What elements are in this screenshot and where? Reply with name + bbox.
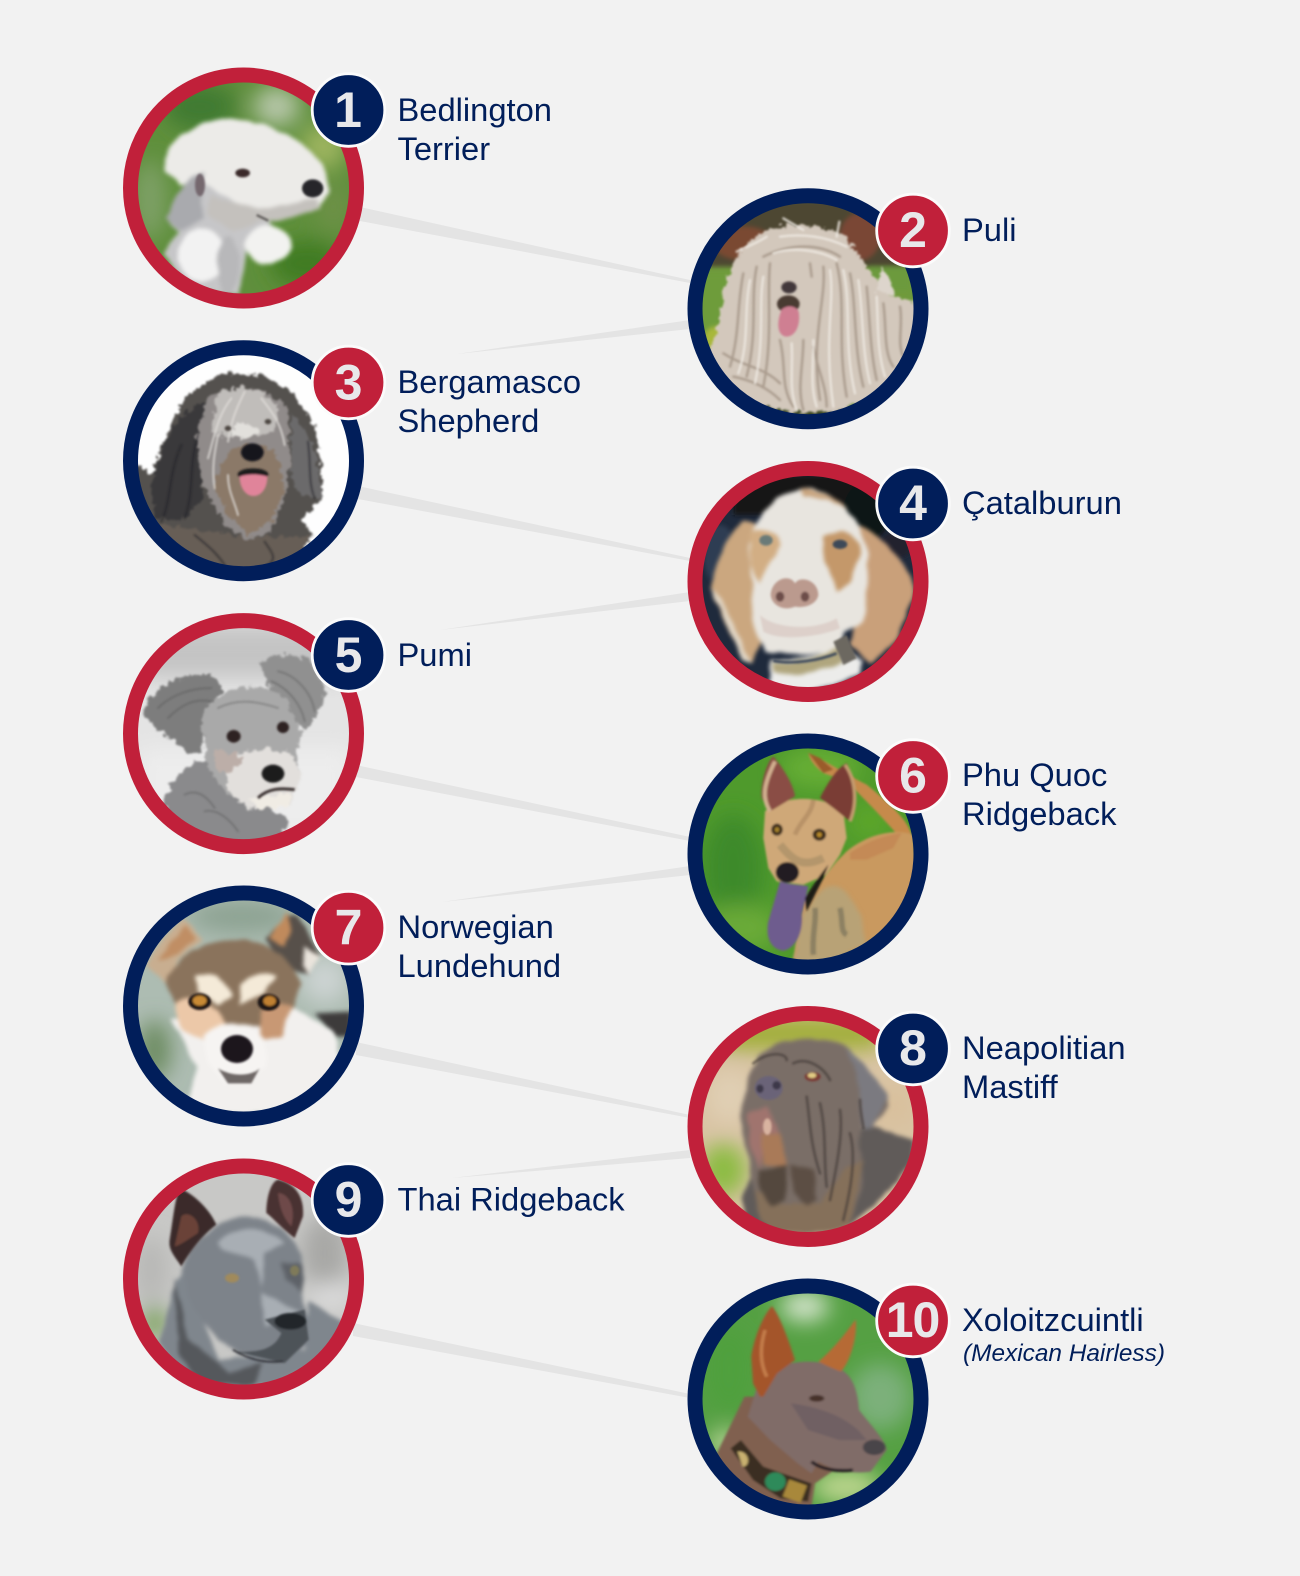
item 9: Thai Ridgeback — [130, 1164, 625, 1392]
label: Phu Quoc — [962, 756, 1107, 793]
label — [962, 1301, 1165, 1367]
photo: Norwegian Lundehund — [135, 897, 355, 1117]
number badge 10 — [877, 1284, 949, 1357]
label: Lundehund — [398, 947, 561, 984]
photo: Thai Ridgeback — [135, 1170, 355, 1390]
item 5: Pumi — [130, 619, 472, 847]
number badge 8 — [877, 1012, 949, 1085]
label: Puli — [962, 211, 1017, 248]
item 6: Phu Quoc Ridgeback — [695, 740, 1117, 967]
label: Bergamasco — [398, 363, 581, 400]
photo: Pumi — [135, 625, 355, 845]
item 1: Bedlington Terrier — [130, 74, 552, 301]
label: Norwegian — [398, 908, 554, 945]
number badge 10: 10 — [886, 1292, 939, 1348]
number badge 5 — [312, 619, 385, 691]
item 2: Puli — [695, 194, 1017, 422]
ring — [695, 1014, 921, 1240]
label: Çatalburun — [962, 484, 1122, 521]
item 4: Catalburun — [695, 467, 1122, 694]
label: (Mexican Hairless) — [963, 1340, 1165, 1367]
ring — [695, 741, 921, 967]
number badge 8: 8 — [899, 1020, 927, 1076]
ring — [130, 348, 356, 574]
number badge 4 — [877, 467, 949, 540]
photo: Phu Quoc Ridgeback — [700, 748, 917, 965]
photo: Puli — [700, 200, 917, 420]
ring — [695, 196, 921, 422]
label: Bedlington — [398, 91, 552, 128]
number badge 7 — [312, 891, 385, 964]
label: Shepherd — [398, 402, 539, 439]
item 3: Bergamasco Shepherd — [130, 346, 581, 574]
photo: Neapolitan Mastiff — [700, 1017, 917, 1237]
number badge 2 — [877, 194, 949, 267]
item 8: Neapolitan Mastiff — [695, 1012, 1126, 1240]
photo: Xoloitzcuintli — [702, 1294, 914, 1504]
ring — [130, 75, 356, 301]
ring — [130, 893, 356, 1119]
number badge 3: 3 — [335, 354, 362, 410]
label: Pumi — [398, 636, 472, 673]
photo: Bedlington Terrier — [133, 80, 353, 300]
number badge 1 — [312, 74, 385, 146]
ring — [130, 621, 356, 847]
item 10: Xoloitzcuintli — [694, 1284, 1165, 1513]
number badge 2: 2 — [899, 202, 927, 258]
number badge 1: 1 — [334, 82, 362, 138]
ring — [695, 1286, 921, 1512]
number badge 7: 7 — [335, 900, 362, 956]
number badge 6 — [877, 740, 949, 812]
ring — [130, 1166, 356, 1392]
label: Neapolitian — [962, 1029, 1126, 1066]
number badge 4: 4 — [899, 475, 927, 531]
label: Terrier — [398, 130, 490, 167]
label: Xoloitzcuintli — [962, 1301, 1144, 1338]
item 7: Norwegian Lundehund — [130, 891, 561, 1119]
number badge 9 — [312, 1164, 385, 1236]
number badge 5: 5 — [335, 627, 362, 683]
ring — [695, 468, 921, 694]
label: Ridgeback — [962, 795, 1117, 832]
photo: Catalburun — [700, 475, 917, 692]
photo: Bergamasco Shepherd — [133, 352, 355, 572]
number badge 9: 9 — [335, 1172, 362, 1228]
label: Mastiff — [962, 1068, 1059, 1105]
label: Thai Ridgeback — [398, 1180, 625, 1218]
connector lines — [353, 207, 690, 1398]
number badge 6: 6 — [899, 748, 927, 804]
number badge 3 — [312, 346, 385, 419]
